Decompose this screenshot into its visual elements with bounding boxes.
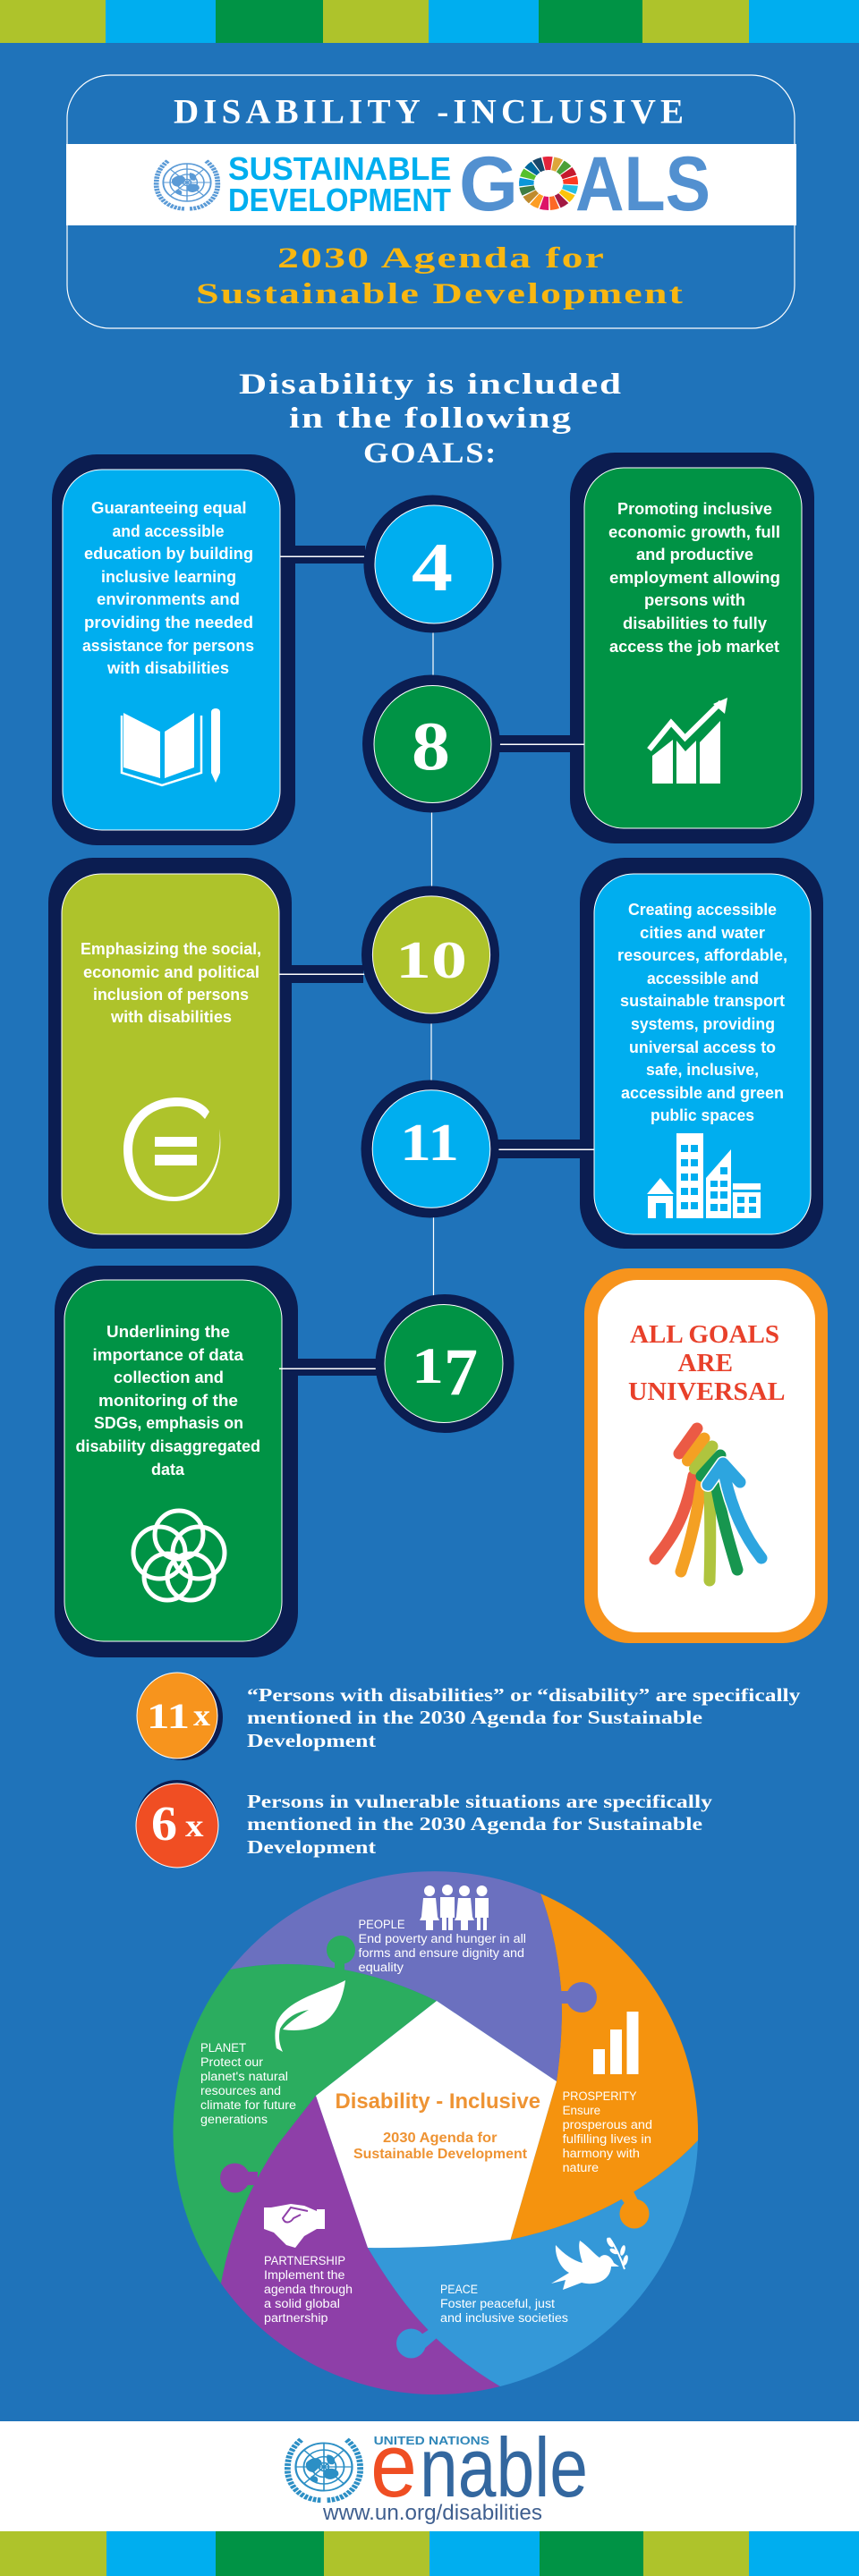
circle: goal 10: 10 (395, 930, 467, 989)
goal 4 text: environments and (97, 590, 240, 608)
badge: 6x: 6 (151, 1796, 177, 1851)
icon: UN emblem (287, 2439, 361, 2500)
goal 10 text (81, 940, 261, 1026)
stat text: mentioned in the 2030 Agenda for Sustainable (247, 1813, 702, 1835)
people text: forms and ensure dignity and (358, 1946, 524, 1960)
goal 11 text: accessible and (647, 970, 759, 987)
goal 4 text (82, 499, 254, 677)
goal 11 text (617, 901, 787, 1124)
stat text: Development (247, 1730, 376, 1751)
prosperity text: harmony with (563, 2147, 640, 2160)
SDG wordmark: ALS (575, 141, 710, 227)
prosperity text: fulfilling lives in (563, 2132, 651, 2146)
goal 11 text: systems, providing (631, 1015, 775, 1033)
icon: handshake (264, 2204, 325, 2248)
bottom colour stripe (0, 2531, 859, 2576)
panel: goal 11 (580, 858, 823, 1249)
icon: dove (551, 2236, 629, 2290)
green tab over people (327, 1936, 355, 1973)
partnership text: a solid global (264, 2297, 340, 2310)
goal 8 text: and productive (636, 546, 753, 564)
segment: prosperity (510, 1894, 698, 2240)
goal 4 text: and accessible (113, 522, 224, 540)
section heading: GOALS: (363, 437, 498, 470)
website: www.un.org/disabilities (322, 2501, 542, 2525)
icon: UN emblem (157, 160, 217, 208)
stat text: “Persons with disabilities” or “disability” are specifically (247, 1684, 801, 1706)
goal 11 text: safe, inclusive, (646, 1061, 759, 1079)
circle: goal 4 (363, 496, 501, 633)
goal 4 text: assistance for persons (82, 637, 254, 655)
circle: goal 8: 8 (412, 708, 450, 784)
segment: partnership (220, 2096, 500, 2394)
footer (0, 2416, 859, 2531)
title: DISABILITY -INCLUSIVE (174, 93, 684, 131)
prosperity text: prosperous and (563, 2118, 652, 2131)
stat: 11 mentions (137, 1673, 801, 1760)
connector: goal 11 (490, 1140, 594, 1158)
goal 17 text: disability disaggregated (75, 1437, 260, 1455)
people text: PEOPLE (358, 1918, 404, 1931)
badge: 11x: 11 (147, 1696, 190, 1736)
icon: raised hand of colours (655, 1428, 761, 1580)
goal 11 text: Creating accessible (628, 901, 777, 919)
segment: peace (368, 2140, 698, 2386)
panel: goal 10 (48, 858, 292, 1249)
planet text: planet's natural (200, 2070, 288, 2083)
goal 8 text: economic growth, full (608, 523, 780, 541)
icon: city (647, 1133, 761, 1218)
peace text: PEACE (440, 2283, 478, 2296)
people text: End poverty and hunger in all (358, 1932, 526, 1945)
icon: interlocking rings (133, 1511, 225, 1600)
planet text: PLANET (200, 2041, 246, 2055)
planet text: resources and (200, 2084, 281, 2097)
goal 4 text: education by building (84, 545, 253, 563)
universal heading: UNIVERSAL (628, 1378, 786, 1406)
SDG wordmark: DEVELOPMENT (228, 182, 451, 218)
goal 11 text: resources, affordable, (617, 946, 787, 964)
icon: growth chart (650, 698, 727, 784)
SDG wordmark (228, 141, 710, 227)
goal 8 text: persons with (644, 591, 745, 609)
circle: goal 17: 1 (412, 1338, 444, 1394)
connector: goal 8 (491, 735, 584, 752)
partnership text (264, 2254, 353, 2325)
segment: people (230, 1871, 597, 2081)
UN enable wordmark: e (370, 2416, 417, 2516)
goal 10 text: with disabilities (110, 1008, 232, 1026)
connector: goal 10 (279, 965, 372, 983)
goal 17 text: SDGs, emphasis on (94, 1414, 243, 1432)
partnership text: agenda through (264, 2283, 353, 2296)
stat: 6 mentions (136, 1780, 713, 1868)
section heading: Disability is included (239, 369, 623, 401)
centre pentagon: 2030 Agenda for (383, 2131, 498, 2146)
universal heading (628, 1321, 786, 1406)
subtitle (196, 242, 685, 310)
circle: goal 17: 7 (444, 1335, 478, 1410)
vertical connector lines (431, 623, 433, 1304)
white logo band (66, 144, 796, 225)
connector: goal 4 (280, 546, 375, 564)
prosperity text (563, 2089, 652, 2174)
circle: goal 4: 4 (412, 529, 453, 606)
partnership text: PARTNERSHIP (264, 2254, 345, 2267)
prosperity text: nature (563, 2161, 599, 2174)
centre pentagon (316, 2001, 557, 2248)
panel: goal 8 (570, 453, 814, 843)
segment: planet (173, 1936, 437, 2284)
goal 10 text: inclusion of persons (93, 986, 249, 1004)
icon: leaf (275, 1980, 345, 2052)
peace text: and inclusive societies (440, 2311, 568, 2325)
top colour stripe (0, 0, 859, 43)
universal heading: ALL GOALS (630, 1321, 779, 1349)
planet text: climate for future (200, 2098, 296, 2112)
prosperity text: PROSPERITY (563, 2089, 637, 2103)
goal 8 text: disabilities to fully (623, 614, 767, 632)
goal 17 text: Underlining the (106, 1323, 230, 1341)
goal 11 text: sustainable transport (620, 992, 785, 1010)
goal 8 text: access the job market (609, 638, 779, 656)
SDG wordmark: SUSTAINABLE (228, 150, 451, 187)
connector: goal 17 (279, 1359, 385, 1376)
goal 17 text: monitoring of the (98, 1392, 238, 1410)
UN enable wordmark (370, 2416, 588, 2516)
circle: goal 11 (361, 1080, 499, 1218)
goal 11 text: public spaces (651, 1106, 754, 1124)
badge: 11x: x (193, 1699, 210, 1733)
goal 8 text: employment allowing (609, 569, 780, 587)
icon: bars (593, 2012, 639, 2074)
puzzle wheel (173, 1871, 698, 2394)
stat text: Development (247, 1836, 376, 1858)
partnership text: partnership (264, 2311, 327, 2325)
stat text (247, 1791, 713, 1858)
stat text: Persons in vulnerable situations are specifically (247, 1791, 713, 1812)
goal 4 text: providing the needed (84, 614, 253, 631)
planet text (200, 2041, 296, 2126)
circle: goal 17 (376, 1294, 514, 1433)
subtitle: 2030 Agenda for (277, 242, 606, 275)
people text: equality (358, 1961, 404, 1974)
UN enable wordmark: UNITED NATIONS (374, 2434, 489, 2447)
centre pentagon: Disability - Inclusive (335, 2089, 540, 2114)
panel: goal 4 (52, 454, 295, 845)
icon: people (420, 1885, 489, 1930)
goal 11 text: accessible and green (621, 1084, 784, 1102)
badge: 11x (137, 1673, 223, 1760)
circle: goal 8 (362, 674, 500, 812)
centre pentagon: Sustainable Development (353, 2147, 528, 2162)
section heading (239, 369, 623, 470)
goal 10 text: economic and political (83, 963, 259, 981)
panel: all goals are universal (584, 1268, 828, 1643)
goal 11 text: cities and water (640, 924, 765, 942)
goal 4 text: inclusive learning (101, 568, 236, 586)
subtitle: Sustainable Development (196, 278, 685, 310)
stat text: mentioned in the 2030 Agenda for Sustainable (247, 1707, 702, 1728)
planet text: generations (200, 2113, 268, 2126)
people text (358, 1918, 526, 1974)
peace text: Foster peaceful, just (440, 2297, 555, 2310)
stat text (247, 1684, 801, 1751)
goal 17 text: data (151, 1461, 185, 1479)
circle: goal 11: 11 (400, 1113, 459, 1172)
goal 17 text: importance of data (93, 1346, 244, 1364)
SDG wordmark: G (459, 141, 518, 227)
goal 17 text (75, 1323, 260, 1479)
peace text (440, 2283, 568, 2325)
goal 10 text: Emphasizing the social, (81, 940, 261, 958)
goal 8 text (608, 500, 780, 656)
goal 8 text: Promoting inclusive (617, 500, 772, 518)
header panel (66, 75, 796, 328)
partnership text: Implement the (264, 2268, 345, 2282)
badge: 6x: x (185, 1808, 204, 1843)
goal 4 text: with disabilities (106, 659, 229, 677)
section heading: in the following (289, 402, 573, 435)
badge: 6x (136, 1780, 218, 1868)
icon: book and pencil (122, 708, 220, 785)
goal 4 text: Guaranteeing equal (91, 499, 247, 517)
circle: goal 10 (361, 886, 499, 1023)
universal heading: ARE (678, 1350, 733, 1377)
icon: equality ring (123, 1097, 220, 1201)
panel: goal 17 (55, 1266, 298, 1657)
prosperity text: Ensure (563, 2104, 600, 2117)
goal 11 text: universal access to (629, 1038, 776, 1056)
icon: SDG colour wheel (523, 160, 574, 207)
goal 17 text: collection and (114, 1368, 224, 1386)
planet text: Protect our (200, 2055, 264, 2069)
UN enable wordmark: nable (420, 2420, 588, 2514)
